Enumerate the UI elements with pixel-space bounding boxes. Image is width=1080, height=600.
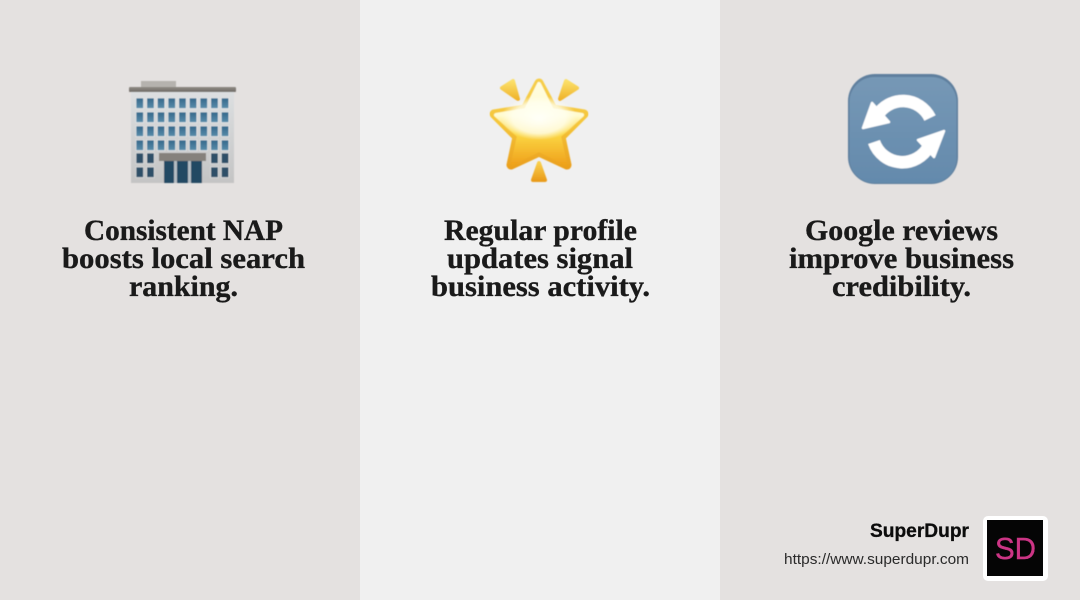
heading: centre column: business activity. <box>431 270 650 303</box>
heading: left column <box>62 214 305 303</box>
heading: centre column: updates signal <box>447 242 633 275</box>
heading: right column <box>789 214 1014 303</box>
icon: office building <box>129 81 236 183</box>
heading: centre column: Regular profile <box>444 214 637 247</box>
heading: right column: improve business <box>789 242 1014 275</box>
panel: left background <box>0 0 360 600</box>
heading: left column: boosts local search <box>62 242 305 275</box>
brand url: https://www.superdupr.com <box>784 552 969 568</box>
logo: SD: SD <box>995 531 1036 566</box>
icon: refresh arrows <box>848 74 958 184</box>
heading: left column: Consistent NAP <box>84 214 283 247</box>
heading: centre column <box>431 214 650 303</box>
logo: SD <box>983 516 1048 581</box>
heading: left column: ranking. <box>129 270 238 303</box>
brand name: SuperDupr <box>870 521 970 542</box>
heading: right column: Google reviews <box>805 214 998 247</box>
heading: right column: credibility. <box>832 270 971 303</box>
icon: glowing star <box>494 81 584 180</box>
panel: centre background <box>360 0 720 600</box>
panel: right background <box>720 0 1080 600</box>
